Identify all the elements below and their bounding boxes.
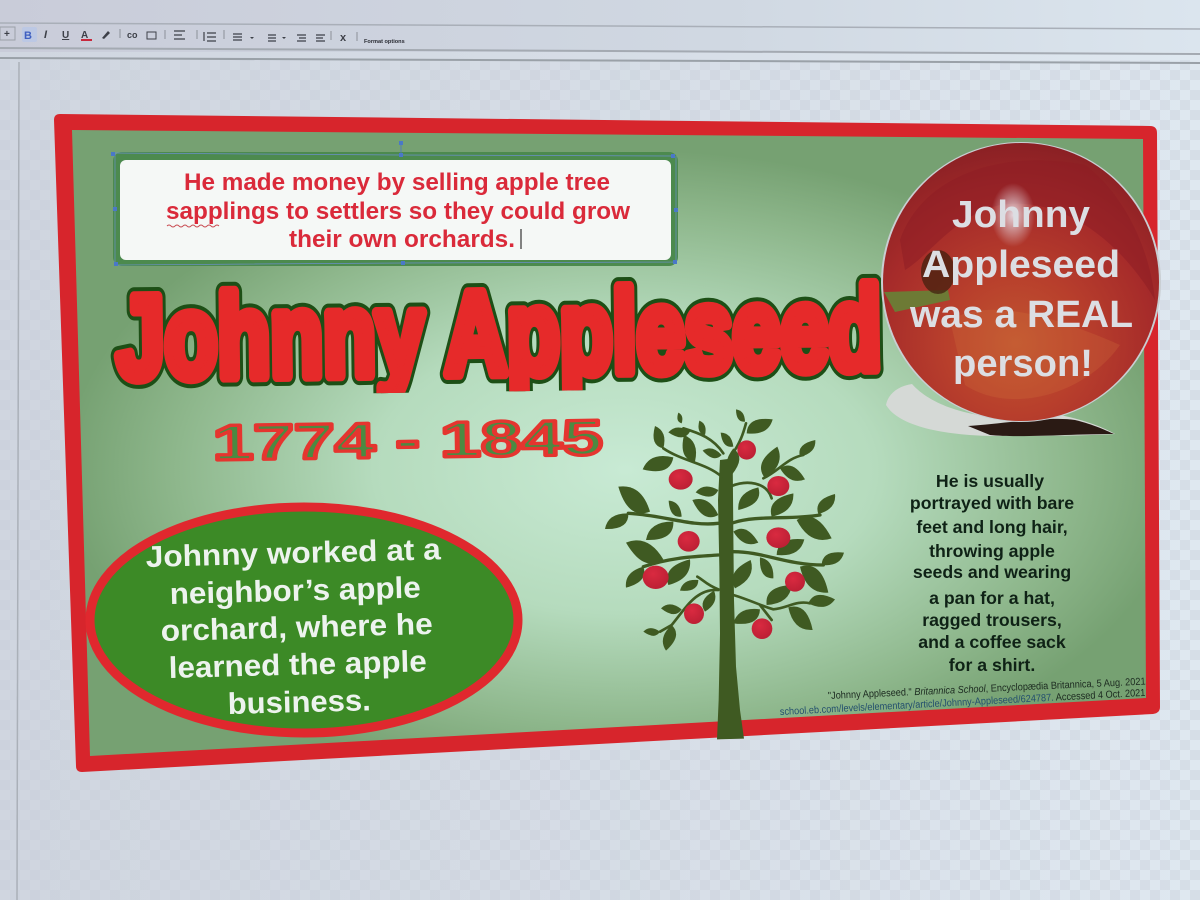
text block: portrayal: throwing apple: [929, 541, 1055, 561]
citation: "Johnny Appleseed." Britannica School, Encyclopædia Britannica, 5 Aug. 2021: [828, 677, 1146, 702]
toolbar: B: [24, 30, 32, 42]
apple label text: Johnny: [952, 194, 1090, 236]
callout: orchard ellipse: neighbor’s apple: [169, 571, 421, 611]
apple shadow: [886, 384, 1115, 436]
text block: portrayal: He is usually: [936, 471, 1044, 491]
toolbar: [0, 27, 405, 45]
toolbar: +: [4, 29, 10, 40]
text box: saplings fact: their own orchards.: [289, 226, 515, 253]
callout: orchard ellipse: Johnny worked at a: [145, 533, 441, 574]
callout: orchard ellipse: orchard, where he: [160, 608, 433, 648]
callout: orchard ellipse: learned the apple: [168, 645, 427, 685]
text block: portrayal: for a shirt.: [949, 655, 1035, 675]
text box: saplings fact: sapplings to settlers so they could grow: [166, 198, 631, 225]
text block: portrayal: feet and long hair,: [916, 517, 1068, 537]
text box: saplings fact: [111, 141, 678, 266]
callout: orchard ellipse: business.: [227, 684, 371, 721]
photo: apple with label: [881, 142, 1161, 436]
text block: portrayal: [910, 471, 1074, 675]
apple label text: Appleseed: [922, 244, 1120, 286]
apple label text: person!: [953, 343, 1093, 385]
title: [110, 274, 884, 394]
tree leaves: [602, 407, 847, 652]
tree branches: [628, 423, 823, 632]
text block: portrayal: portrayed with bare: [910, 493, 1074, 513]
text block: portrayal: and a coffee sack: [918, 632, 1066, 652]
apple label text: was a REAL: [909, 294, 1133, 336]
toolbar: co: [127, 30, 138, 40]
text box: saplings fact: He made money by selling apple tree: [184, 169, 610, 196]
text block: portrayal: a pan for a hat,: [929, 588, 1055, 608]
illustration: apple tree: [602, 407, 847, 739]
toolbar: A: [81, 30, 88, 41]
tree apples: [643, 440, 805, 639]
dates: 1774 - 1845: [212, 410, 603, 471]
citation: school.eb.com/levels/elementary/article/Johnny-Appleseed/624787. Accessed 4 Oct. 2021: [780, 688, 1146, 718]
panel: slide frame: [54, 114, 1160, 772]
text block: portrayal: ragged trousers,: [922, 610, 1062, 630]
toolbar: Format options: [364, 39, 405, 45]
apple label text: [909, 194, 1133, 385]
panel: slide background: [72, 130, 1146, 756]
title: Johnny Appleseed: [116, 263, 882, 403]
title: Johnny Appleseed: [116, 263, 882, 403]
toolbar: U: [62, 30, 69, 41]
tree trunk: [717, 458, 744, 739]
toolbar: x: [340, 32, 347, 44]
toolbar: I: [44, 29, 48, 41]
text block: portrayal: seeds and wearing: [913, 562, 1071, 582]
callout: orchard ellipse: [90, 507, 518, 733]
